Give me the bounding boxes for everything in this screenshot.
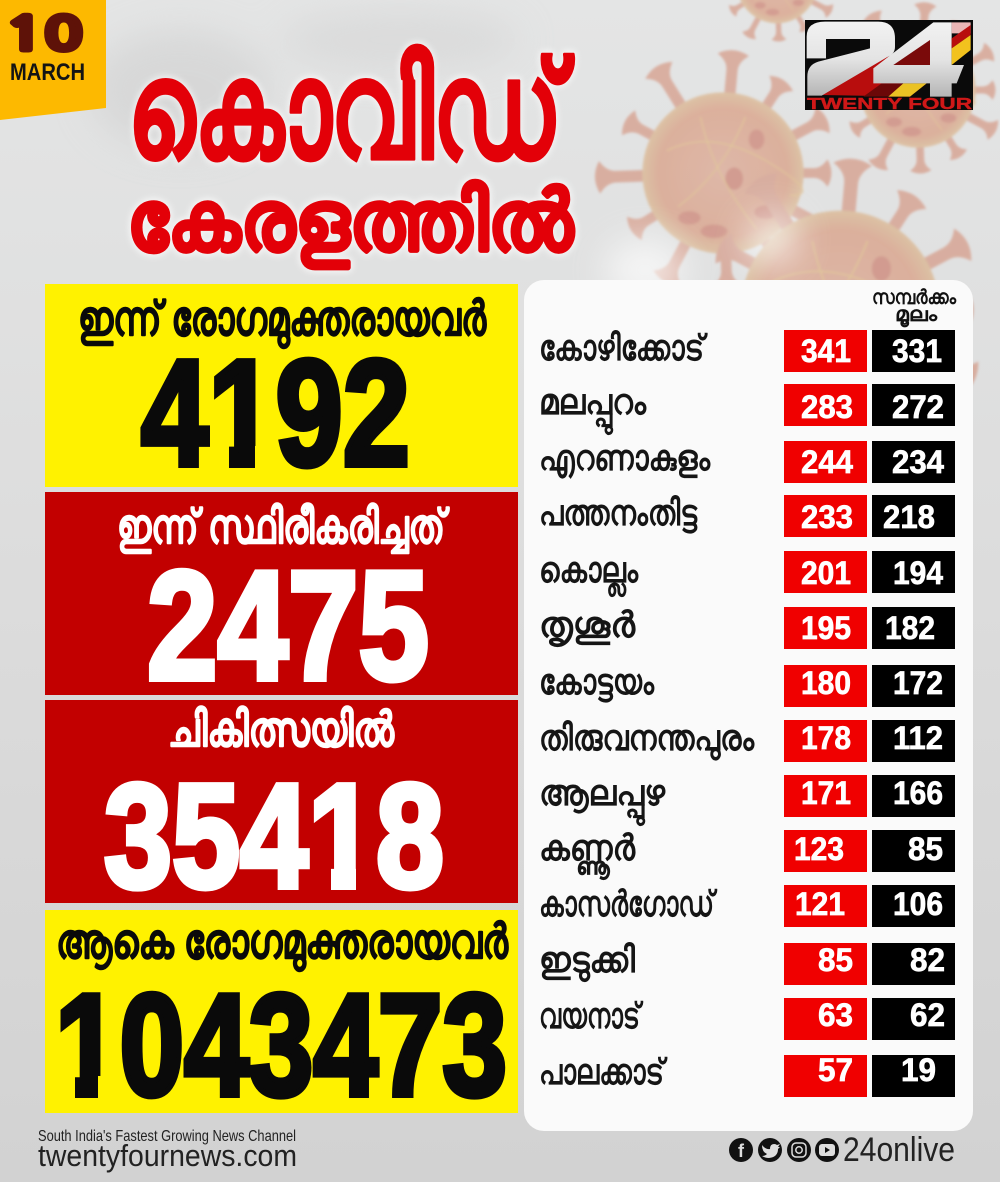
row: Malappuram: 272: [892, 389, 944, 425]
row: Wayanad: [539, 995, 955, 1040]
row: Kottayam: 180: [801, 665, 851, 701]
row: Thrissur: 182: [885, 610, 935, 646]
row: Thiruvananthapuram: തിരുവനന്തപുരം: [539, 717, 755, 761]
row: Kollam: 194: [893, 555, 943, 591]
footer: website: twentyfournews.com: [38, 1138, 297, 1173]
footer: social handle: [729, 1131, 955, 1169]
date badge: [0, 0, 106, 120]
icon: youtube: [815, 1138, 839, 1162]
heading: under treatment: ചികിത്സയിൽ: [168, 704, 395, 757]
row: Pathanamthitta: 218: [883, 499, 935, 535]
icon: facebook: [729, 1138, 753, 1162]
handle text: 24onlive: [843, 1131, 955, 1169]
row: Idukki: [539, 939, 955, 985]
row: Kozhikode: 331: [892, 333, 942, 369]
row: Ernakulam: എറണാകുളം: [539, 437, 711, 479]
row: Kozhikode: കോഴിക്കോട്: [539, 327, 708, 368]
title: കൊവിഡ്: [128, 35, 574, 186]
panel: district table: [524, 280, 973, 1131]
heading: confirmed today: ഇന്ന് സ്ഥിരീകരിച്ചത്: [117, 501, 450, 554]
row: Malappuram: [539, 381, 955, 436]
row: Palakkad: 19: [901, 1052, 936, 1088]
row: Pathanamthitta: [539, 492, 955, 537]
panel: confirmed today: [45, 492, 518, 712]
logo: 24 twenty four: TWENTY FOUR: [807, 96, 973, 113]
title: [127, 35, 574, 269]
row: Pathanamthitta: പത്തനംതിട്ട: [539, 492, 698, 534]
row: Wayanad: 63: [818, 997, 853, 1033]
row: Malappuram: മലപ്പുറം: [539, 381, 647, 436]
number: 2475: 2475: [147, 539, 429, 712]
row: Kollam: കൊല്ലം: [539, 549, 639, 598]
icon: instagram: [787, 1138, 811, 1162]
row: Kannur: 85: [908, 831, 943, 867]
row: Kannur: 123: [794, 831, 844, 867]
heading: recovered today: ഇന്ന് രോഗമുക്തരായവർ: [78, 293, 487, 349]
row: Kottayam: [539, 661, 955, 707]
row: Idukki: 82: [910, 942, 945, 978]
row: Wayanad: വയനാട്: [539, 995, 643, 1036]
row: Kozhikode: [539, 327, 955, 372]
row: Wayanad: 62: [910, 997, 945, 1033]
row: Palakkad: പാലക്കാട്: [539, 1051, 668, 1092]
panel: under treatment: [45, 700, 518, 919]
row: Pathanamthitta: 233: [801, 499, 853, 535]
title: കേരളത്തിൽ: [127, 174, 574, 269]
number: 35418: 35418: [104, 754, 444, 919]
row: Idukki: 85: [818, 942, 853, 978]
row: Kottayam: 172: [893, 665, 943, 701]
panel: recovered today: [45, 284, 518, 497]
row: Thiruvananthapuram: 112: [893, 720, 943, 756]
row: Thrissur: [539, 604, 955, 649]
row: Kollam: [539, 549, 955, 598]
row: Alappuzha: 171: [801, 775, 851, 811]
panel: total recovered: [45, 910, 518, 1126]
row: Kollam: 201: [801, 555, 851, 591]
row: Palakkad: [539, 1051, 955, 1097]
date badge: 10: [5, 11, 83, 57]
number: 4192: 4192: [141, 328, 410, 497]
row: Thiruvananthapuram: 178: [801, 720, 851, 756]
row: Ernakulam: 244: [801, 444, 853, 480]
row: Alappuzha: 166: [893, 775, 943, 811]
row: Kasaragod: കാസർഗോഡ്: [539, 883, 717, 924]
row: Kasaragod: 121: [795, 886, 845, 922]
row: Thiruvananthapuram: [539, 717, 955, 762]
title: കേരളത്തിൽ: [127, 174, 574, 269]
number: 1043473: 1043473: [55, 964, 507, 1126]
row: Alappuzha: [539, 772, 955, 827]
row: Malappuram: 283: [801, 389, 853, 425]
date badge: MARCH: [10, 59, 85, 86]
row: Kasaragod: 106: [893, 886, 943, 922]
column heading: through contact: [872, 287, 957, 328]
title: കൊവിഡ്: [128, 35, 574, 186]
row: Alappuzha: ആലപ്പുഴ: [539, 772, 666, 827]
row: Ernakulam: [539, 437, 955, 483]
row: Thrissur: തൃശൂർ: [539, 604, 636, 647]
icon: twitter: [758, 1138, 782, 1162]
row: Kozhikode: 341: [801, 333, 851, 369]
footer: website: South India's Fastest Growing News Channel: [38, 1128, 296, 1145]
row: Palakkad: 57: [818, 1052, 853, 1088]
row: Ernakulam: 234: [892, 444, 944, 480]
row: Kasaragod: [539, 883, 955, 927]
row: Idukki: ഇടുക്കി: [539, 939, 635, 983]
virus illustration: [594, 0, 1000, 455]
heading: total recovered: ആകെ രോഗമുക്തരായവർ: [56, 916, 509, 972]
row: Kottayam: കോട്ടയം: [539, 661, 655, 703]
icon: facebook: f: [738, 1141, 745, 1161]
row: Kannur: [539, 827, 955, 881]
logo: 24 twenty four: [805, 20, 973, 113]
row: Kannur: കണ്ണൂർ: [539, 827, 636, 881]
row: Thrissur: 195: [801, 610, 851, 646]
column heading: through contact: സമ്പർക്കം: [872, 287, 957, 309]
column heading: through contact: മൂലം: [895, 304, 938, 328]
